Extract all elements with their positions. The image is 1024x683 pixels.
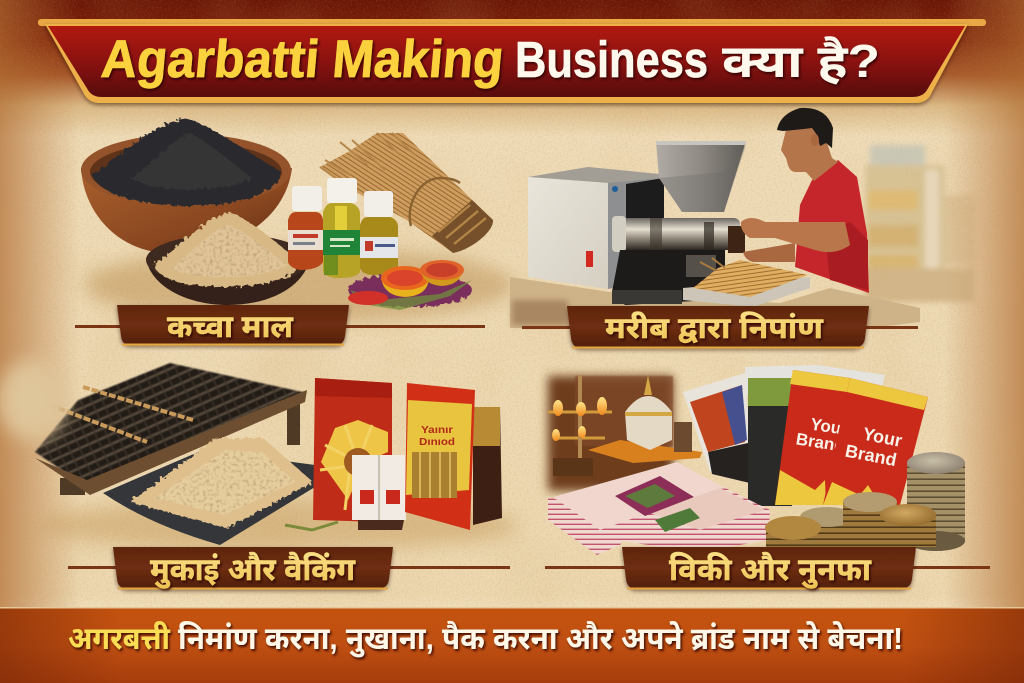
your brand packet left: Your bbox=[809, 415, 849, 439]
panel: raw materials bbox=[75, 118, 515, 345]
your brand packet left bbox=[775, 370, 850, 505]
incense packs with coloured sticks bbox=[683, 365, 885, 506]
title text: Business bbox=[515, 31, 708, 88]
drying rack bbox=[0, 360, 307, 495]
machine bbox=[528, 141, 746, 305]
title text: क्या है? bbox=[722, 35, 880, 87]
icon: wooden bowl with charcoal powder bbox=[81, 118, 292, 253]
label: drying and packing: मुकाइं और वैकिंग bbox=[150, 552, 356, 589]
label: raw materials: कच्वा माल bbox=[167, 309, 294, 344]
tray of drying flakes bbox=[103, 438, 338, 545]
background shelves bbox=[865, 145, 975, 302]
label: sales and profit bbox=[545, 547, 990, 589]
worker bbox=[741, 108, 869, 293]
icon: three oil bottles bbox=[288, 178, 398, 278]
panel: machine manufacturing bbox=[510, 108, 975, 348]
gold brand packet bbox=[405, 383, 502, 530]
your brand packet right: Your bbox=[861, 424, 904, 451]
label: machine manufacturing: मरीब द्वारा निपांण bbox=[605, 311, 824, 345]
title banner bbox=[38, 19, 986, 103]
stacks of coins bbox=[765, 452, 965, 551]
stacks of banknotes bbox=[548, 462, 770, 555]
icon: stick bundle bbox=[320, 133, 493, 253]
footer band bbox=[0, 607, 1024, 683]
label: drying and packing bbox=[68, 547, 510, 589]
footer text: अगरबत्ती bbox=[68, 621, 171, 656]
temple lamps scene bbox=[548, 375, 702, 491]
small white packets bbox=[352, 455, 406, 530]
your brand packet left: Brand bbox=[795, 429, 846, 456]
title text bbox=[99, 30, 880, 89]
tray with sticks bbox=[683, 258, 810, 307]
title text: Agarbatti Making bbox=[99, 30, 506, 89]
footer text: निमांण करना, नुखाना, पैक करना और अपने ब्रांड नाम से बेचना! bbox=[178, 621, 903, 658]
your brand packet right bbox=[823, 378, 928, 505]
icon: dark bowl with sawdust bbox=[146, 212, 310, 305]
red packet bbox=[313, 378, 392, 522]
work table bbox=[510, 277, 920, 328]
label: sales and profit: विकी और नुनफा bbox=[669, 552, 872, 589]
label: raw materials bbox=[75, 305, 485, 345]
label: machine manufacturing bbox=[522, 306, 918, 348]
panel: sales and profit bbox=[545, 365, 990, 589]
gold brand packet: Dınıod bbox=[419, 437, 455, 448]
gold brand packet: Yaınır bbox=[421, 425, 453, 436]
your brand packet right: Brand bbox=[844, 441, 898, 470]
panel: drying and packing bbox=[0, 360, 520, 589]
icon: flowers and colour bowls bbox=[348, 260, 472, 310]
